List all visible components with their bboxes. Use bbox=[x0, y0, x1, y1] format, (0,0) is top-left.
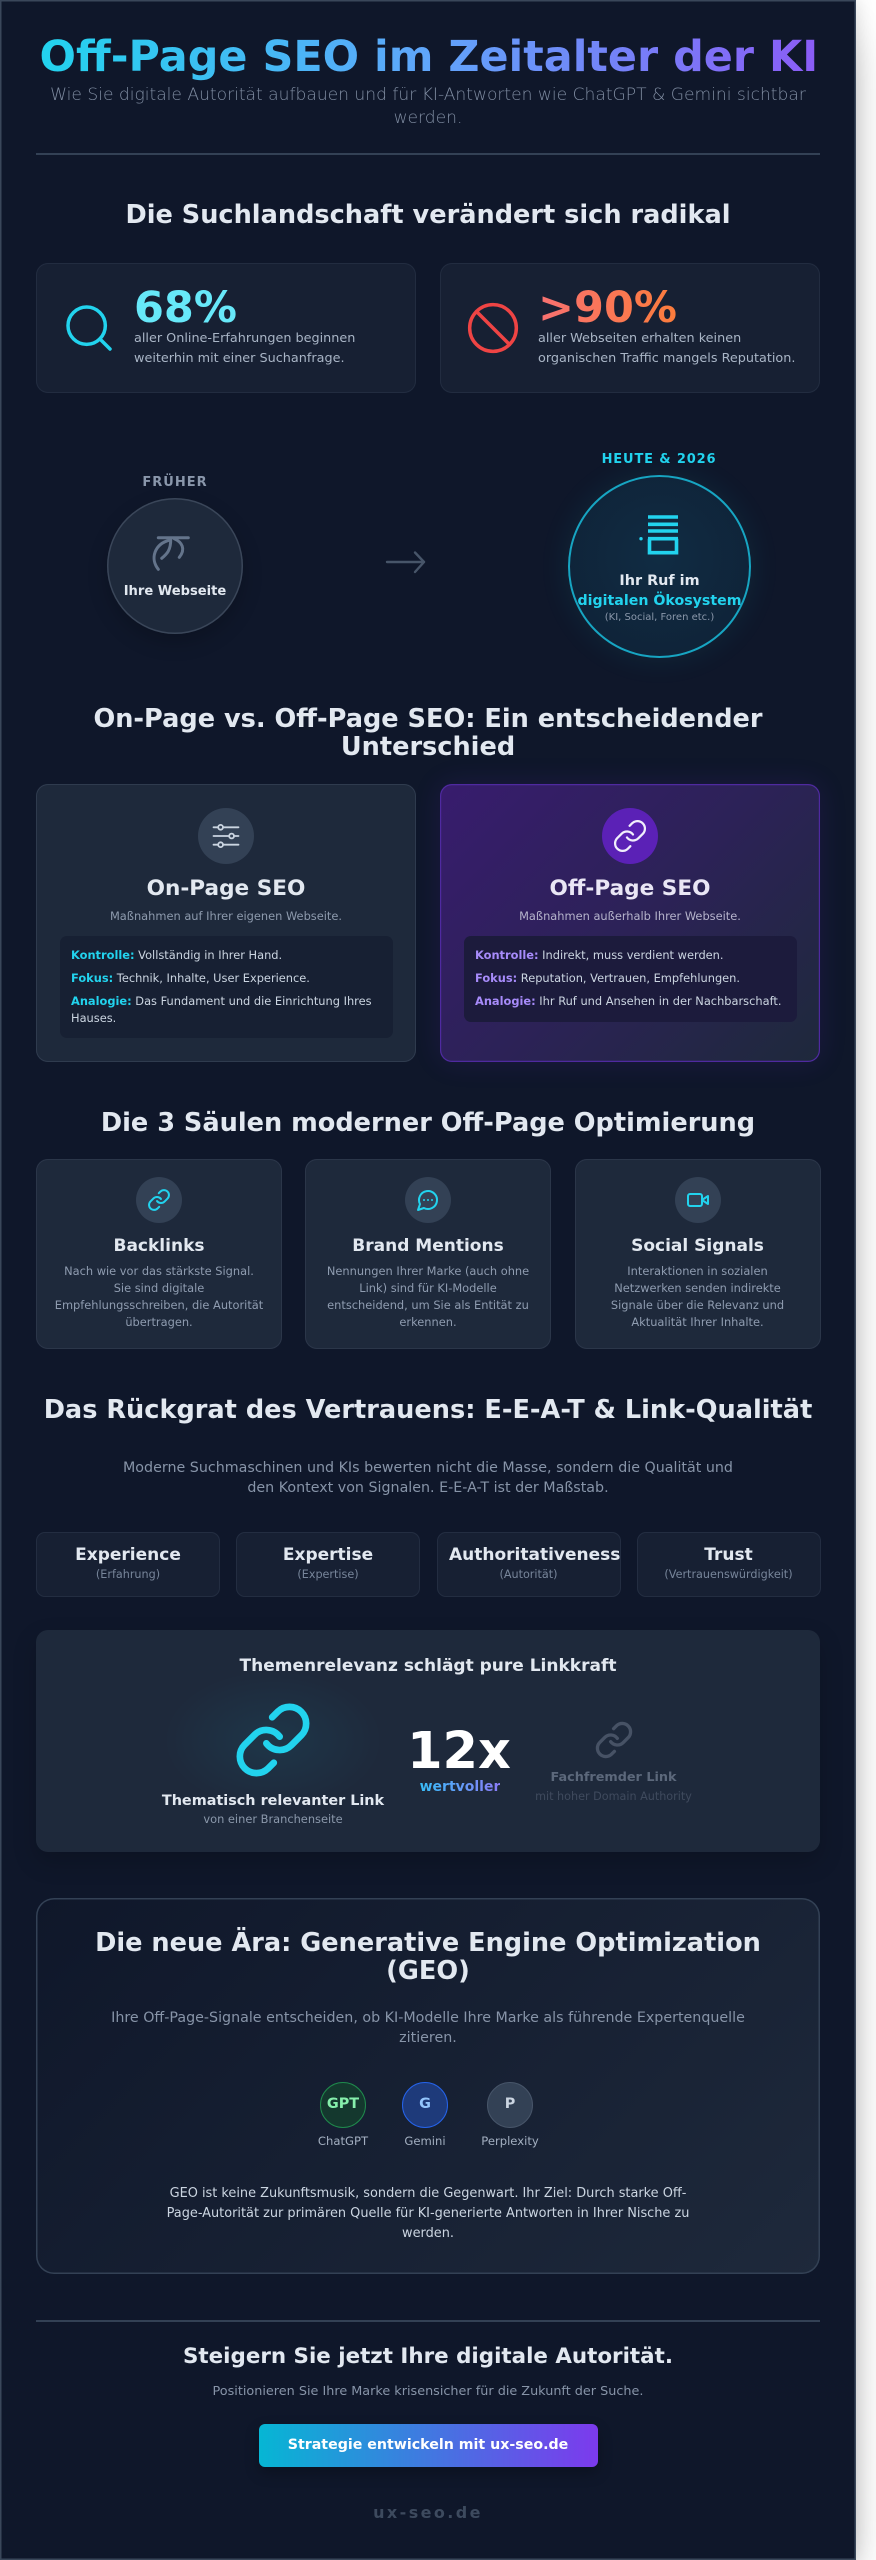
pillar text: Empfehlungsschreiben, die Autorität bbox=[55, 1298, 263, 1312]
icon: prohibited bbox=[468, 302, 518, 354]
AI model: Gemini bbox=[402, 2082, 448, 2148]
icon: chat bubble bbox=[405, 1177, 451, 1223]
arrow bbox=[386, 551, 426, 574]
detail: Analogie: Hauses. bbox=[71, 1010, 116, 1024]
intro text: den Kontext von Signalen. E-E-A-T ist der Maßstab. bbox=[247, 1480, 609, 1496]
pillar text: Link) sind für KI-Modelle bbox=[359, 1281, 497, 1295]
card: experience bbox=[36, 1532, 220, 1597]
panel heading: Themenrelevanz schlägt pure Linkkraft bbox=[240, 1656, 616, 1676]
GEO conclusion: Page-Autorität zur primären Quelle für KI-generierte Antworten in Ihrer Nische zu bbox=[167, 2206, 689, 2221]
pillar text: Nennungen Ihrer Marke (auch ohne bbox=[327, 1264, 529, 1278]
heading: three pillars: Die 3 Säulen moderner Off-Page Optimierung bbox=[101, 1108, 755, 1138]
detail: Analogie bbox=[71, 994, 372, 1024]
label: heute: HEUTE & 2026 bbox=[602, 452, 716, 467]
circle: digital ecosystem bbox=[568, 475, 751, 658]
badge G: G bbox=[419, 2096, 431, 2112]
multiplier caption: wertvoller bbox=[420, 1779, 500, 1795]
panel: stat >90% bbox=[440, 263, 820, 393]
AI model: Perplexity bbox=[481, 2082, 539, 2148]
unrelated link note: mit hoher Domain Authority bbox=[535, 1790, 692, 1803]
translation: (Erfahrung) bbox=[96, 1568, 160, 1581]
caption highlight: digitalen Ökosystem bbox=[577, 593, 742, 609]
pillar text bbox=[611, 1264, 784, 1329]
pillar heading: Social Signals bbox=[631, 1236, 764, 1256]
subtitle: werden. bbox=[394, 108, 462, 128]
detail: Analogie: Analogie: Das Fundament und die Einrichtung Ihres bbox=[71, 994, 372, 1008]
card subheading: Maßnahmen außerhalb Ihrer Webseite. bbox=[519, 909, 741, 923]
badge P bbox=[487, 2082, 533, 2128]
stat description bbox=[538, 331, 795, 366]
footer brand: ux-seo.de bbox=[373, 2503, 483, 2522]
heading: on-page vs off-page: On-Page vs. Off-Page SEO: Ein entscheidender bbox=[93, 704, 763, 734]
pillar text: Signale über die Relevanz und bbox=[611, 1298, 784, 1312]
card: authoritativeness bbox=[436, 1532, 620, 1597]
heading: on-page vs off-page bbox=[93, 704, 763, 762]
pillar text: Nach wie vor das stärkste Signal. bbox=[64, 1264, 254, 1278]
heading: on-page vs off-page: Unterschied bbox=[341, 732, 515, 762]
pillar heading: Brand Mentions bbox=[352, 1236, 504, 1256]
stat description: weiterhin mit einer Suchanfrage. bbox=[134, 351, 345, 366]
translation: (Autorität) bbox=[499, 1568, 558, 1581]
detail box bbox=[60, 936, 393, 1038]
pillar text: erkennen. bbox=[399, 1315, 457, 1329]
pillar text: Interaktionen in sozialen bbox=[627, 1264, 768, 1278]
stat description: organischen Traffic mangels Reputation. bbox=[538, 351, 795, 366]
card: trust bbox=[636, 1532, 820, 1597]
caption note: (KI, Social, Foren etc.) bbox=[605, 612, 714, 623]
subtitle bbox=[50, 85, 806, 128]
icon: magnifier bbox=[66, 305, 112, 351]
detail box bbox=[464, 936, 797, 1022]
badge G bbox=[402, 2082, 448, 2128]
card subheading: Maßnahmen auf Ihrer eigenen Webseite. bbox=[110, 909, 342, 923]
card: expertise bbox=[236, 1532, 420, 1597]
detail: Kontrolle: Kontrolle: Indirekt, muss verdient werden. bbox=[475, 948, 724, 962]
badge GPT: GPT bbox=[327, 2096, 359, 2112]
GEO heading: (GEO) bbox=[386, 1956, 470, 1986]
panel: stat 68% bbox=[36, 263, 416, 393]
button: Strategie entwickeln mit ux-seo.de bbox=[288, 2437, 568, 2453]
panel: GEO bbox=[36, 1898, 820, 2274]
icon: broken link bbox=[152, 536, 190, 571]
GEO conclusion: werden. bbox=[402, 2226, 454, 2241]
detail: Kontrolle: Kontrolle: Vollständig in Ihrer Hand. bbox=[71, 948, 282, 962]
stat value >90%: >90% bbox=[538, 283, 677, 333]
detail: Analogie: Analogie: Ihr Ruf und Ansehen in der Nachbarschaft. bbox=[475, 994, 781, 1008]
relevant link note: von einer Branchenseite bbox=[203, 1812, 343, 1826]
label: früher: FRÜHER bbox=[142, 475, 208, 490]
relevant link label: Thematisch relevanter Link bbox=[162, 1793, 384, 1809]
heading: search landscape: Die Suchlandschaft verändert sich radikal bbox=[125, 200, 731, 230]
GEO conclusion: GEO ist keine Zukunftsmusik, sondern die Gegenwart. Ihr Ziel: Durch starke Off- bbox=[170, 2186, 686, 2201]
caption: Ihre Webseite bbox=[124, 584, 226, 599]
card heading: On-Page SEO bbox=[147, 876, 305, 901]
stat description bbox=[134, 331, 355, 366]
card heading: Off-Page SEO bbox=[550, 876, 710, 901]
AI model: ChatGPT bbox=[318, 2082, 368, 2148]
intro text bbox=[123, 1460, 733, 1496]
call to action heading: Steigern Sie jetzt Ihre digitale Autorität. bbox=[183, 2344, 673, 2369]
name: Trust bbox=[704, 1545, 753, 1565]
translation: (Expertise) bbox=[297, 1568, 359, 1581]
model name: ChatGPT bbox=[318, 2134, 368, 2148]
translation: (Vertrauenswürdigkeit) bbox=[664, 1568, 793, 1581]
icon: large relevant link bbox=[236, 1704, 310, 1776]
icon: stack and box bbox=[639, 515, 678, 554]
detail: Fokus: Fokus: Reputation, Vertrauen, Empfehlungen. bbox=[475, 971, 740, 985]
intro text: Moderne Suchmaschinen und KIs bewerten nicht die Masse, sondern die Qualität und bbox=[123, 1460, 733, 1476]
icon: faint unrelated link bbox=[596, 1722, 632, 1758]
divider bbox=[36, 153, 820, 154]
pillar text: übertragen. bbox=[125, 1315, 193, 1329]
panel: topical relevance bbox=[36, 1630, 820, 1852]
pillar text bbox=[55, 1264, 263, 1329]
GEO heading bbox=[95, 1927, 761, 1986]
icon: sliders bbox=[198, 808, 254, 864]
detail: Fokus: Fokus: Technik, Inhalte, User Experience. bbox=[71, 971, 310, 985]
pillar text: Sie sind digitale bbox=[114, 1281, 204, 1295]
glow behind relevant link bbox=[163, 1670, 383, 1810]
name: Expertise bbox=[283, 1545, 373, 1565]
panel: on-page bbox=[36, 784, 416, 1062]
GEO intro: Ihre Off-Page-Signale entscheiden, ob KI-Modelle Ihre Marke als führende Expertenquelle bbox=[111, 2010, 745, 2026]
GEO intro bbox=[111, 2010, 745, 2046]
call to action text: Positionieren Sie Ihre Marke krisensicher für die Zukunft der Suche. bbox=[213, 2384, 643, 2399]
multiplier 12x: 12x bbox=[407, 1722, 511, 1781]
panel: backlinks bbox=[36, 1159, 282, 1349]
model name: Perplexity bbox=[481, 2134, 539, 2148]
GEO heading: Die neue Ära: Generative Engine Optimization bbox=[95, 1928, 761, 1958]
pillar text bbox=[327, 1264, 529, 1329]
stat value 68%: 68% bbox=[134, 283, 237, 333]
icon: video bbox=[674, 1177, 720, 1223]
panel: social signals bbox=[574, 1159, 820, 1349]
heading: E-E-A-T: Das Rückgrat des Vertrauens: E-E-A-T & Link-Qualität bbox=[44, 1395, 812, 1425]
panel: brand mentions bbox=[305, 1159, 551, 1349]
icon: chain bbox=[602, 808, 658, 864]
pillar text: Aktualität Ihrer Inhalte. bbox=[631, 1315, 764, 1329]
title: Off-Page SEO im Zeitalter der KI bbox=[40, 32, 818, 82]
divider bbox=[36, 2320, 820, 2322]
name: Authoritativeness bbox=[449, 1545, 620, 1565]
badge GPT bbox=[320, 2082, 366, 2128]
GEO intro: zitieren. bbox=[399, 2030, 457, 2046]
panel: off-page bbox=[440, 784, 820, 1062]
icon: link bbox=[136, 1177, 182, 1223]
GEO conclusion bbox=[167, 2186, 689, 2241]
pillar text: entscheidend, um Sie als Entität zu bbox=[327, 1298, 529, 1312]
stat description: aller Webseiten erhalten keinen bbox=[538, 331, 741, 346]
pillar heading: Backlinks bbox=[114, 1236, 204, 1256]
circle: your website bbox=[107, 498, 243, 634]
pillar text: Netzwerken senden indirekte bbox=[614, 1281, 781, 1295]
name: Experience bbox=[75, 1545, 181, 1565]
unrelated link label: Fachfremder Link bbox=[550, 1770, 676, 1785]
caption: Ihr Ruf im bbox=[619, 573, 700, 589]
subtitle: Wie Sie digitale Autorität aufbauen und für KI-Antworten wie ChatGPT & Gemini sichtbar bbox=[50, 85, 806, 105]
button bbox=[258, 2424, 598, 2467]
stat description: aller Online-Erfahrungen beginnen bbox=[134, 331, 355, 346]
model name: Gemini bbox=[404, 2134, 446, 2148]
badge P: P bbox=[505, 2096, 515, 2112]
